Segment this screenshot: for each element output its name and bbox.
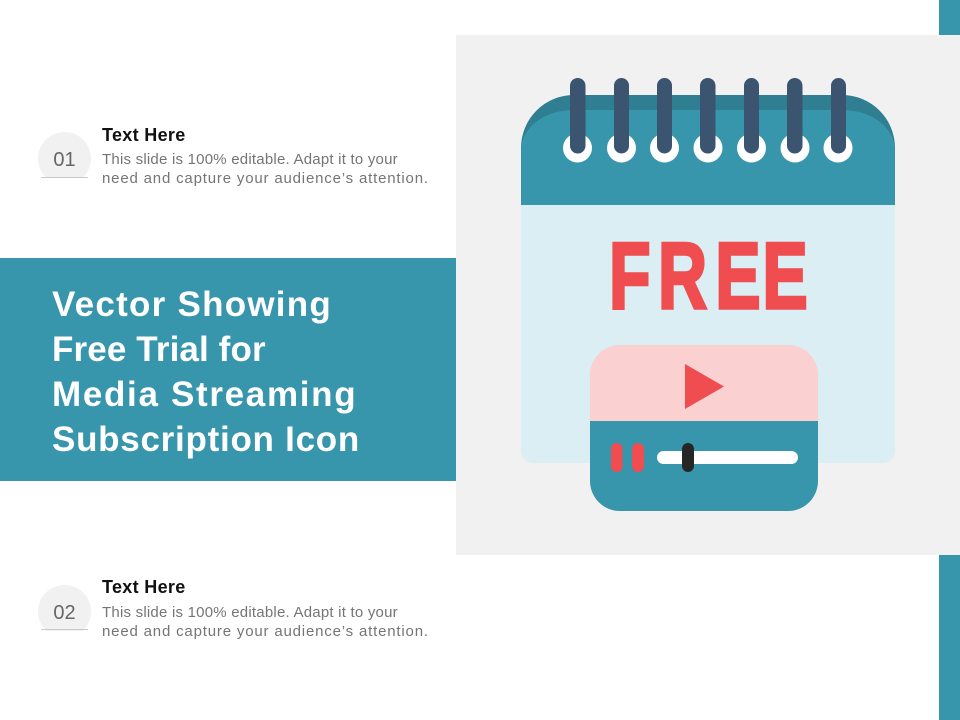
calendar header <box>521 95 895 205</box>
item 02 <box>38 577 429 640</box>
progress knob <box>682 443 694 472</box>
title: Media Streaming <box>52 375 357 414</box>
badge rule 02 <box>41 629 88 630</box>
heading 01: Text Here <box>102 125 186 145</box>
text block 01: This slide is 100% editable. Adapt it to your <box>102 151 398 168</box>
badge rule 01 <box>41 177 88 178</box>
calendar page <box>521 200 895 463</box>
title: Subscription Icon <box>52 420 360 459</box>
spiral rings <box>570 78 846 154</box>
text block 02: need and capture your audience’s attention. <box>102 623 429 640</box>
progress track <box>657 451 798 464</box>
panel: icon background <box>456 35 960 555</box>
heading 02: Text Here <box>102 577 186 597</box>
title: Vector Showing <box>52 285 332 324</box>
number badge 02 <box>38 585 91 631</box>
right accent bar bottom <box>939 555 960 720</box>
item 01 <box>38 125 429 187</box>
play triangle <box>685 364 724 409</box>
panel: title band <box>0 258 456 481</box>
text block 02: This slide is 100% editable. Adapt it to your <box>102 604 398 621</box>
right accent bar top <box>939 0 960 35</box>
number badge 01 <box>38 132 91 177</box>
FREE label: FREE <box>609 224 808 329</box>
number badge 01: 01 <box>53 149 76 171</box>
player controls panel <box>590 421 818 511</box>
binding holes <box>563 134 852 162</box>
pause bars <box>611 443 644 472</box>
title <box>52 285 360 459</box>
text block 01: need and capture your audience’s attention. <box>102 170 429 187</box>
text block 02 <box>102 604 429 640</box>
video player <box>590 345 818 511</box>
title: Free Trial for <box>52 330 266 369</box>
number badge 02: 02 <box>53 602 76 624</box>
text block 01 <box>102 151 429 187</box>
player screen <box>590 345 818 421</box>
